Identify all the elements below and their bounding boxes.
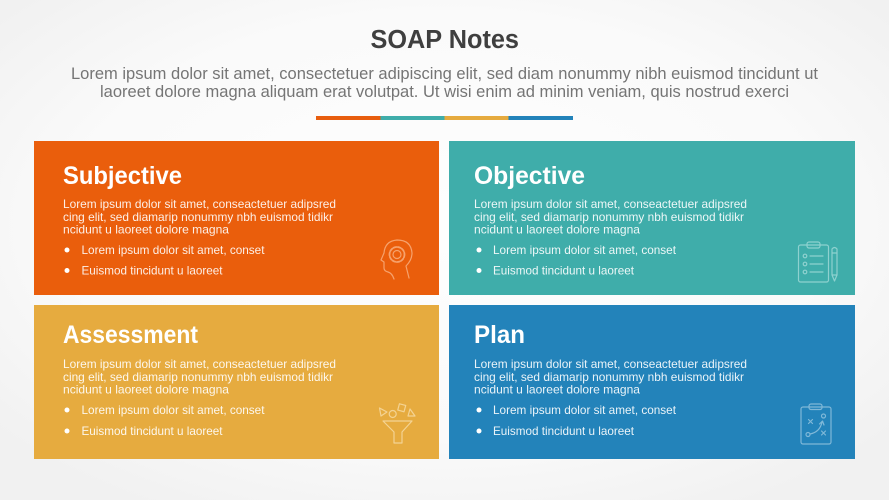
body text: Objective: cing elit, sed diamarip nonummy nbh euismod tidikr <box>474 210 744 224</box>
bullet list: Objective: Lorem ipsum dolor sit amet, conset <box>493 243 677 257</box>
body text: Plan: cing elit, sed diamarip nonummy nbh euismod tidikr <box>474 370 744 384</box>
body text: Assessment: Lorem ipsum dolor sit amet, conseactetuer adipsred <box>63 357 336 371</box>
body text: Assessment: cing elit, sed diamarip nonummy nbh euismod tidikr <box>63 370 333 384</box>
bullet list: Subjective: Euismod tincidunt u laoreet <box>82 264 223 278</box>
icon: clipboard checklist and pencil <box>798 242 837 282</box>
body text: Subjective: Lorem ipsum dolor sit amet, conseactetuer adipsred <box>63 197 336 211</box>
bullet list: Subjective: Lorem ipsum dolor sit amet, conset <box>82 243 265 257</box>
title: SOAP Notes <box>370 26 519 54</box>
bullet list: Assessment <box>64 403 265 438</box>
body text: Plan <box>474 357 747 396</box>
bullet list: Subjective <box>64 243 265 278</box>
body text: Plan: ncidunt u laoreet dolore magna <box>474 382 640 396</box>
subtitle text: laoreet dolore magna aliquam erat volutpat. Ut wisi enim ad minim veniam, quis nostrud exerci <box>100 82 789 101</box>
subtitle text <box>71 64 818 101</box>
icon: head with gear <box>381 240 412 279</box>
heading: Assessment: Assessment <box>63 321 199 349</box>
body text: Objective: ncidunt u laoreet dolore magna <box>474 222 640 236</box>
bullet list: Assessment: Euismod tincidunt u laoreet <box>82 424 223 438</box>
bullet list: Plan <box>476 403 677 438</box>
bullet list: Objective <box>476 243 677 278</box>
icon: clipboard with strategy play <box>801 404 831 444</box>
body text: Subjective: ncidunt u laoreet dolore magna <box>63 222 229 236</box>
icon: funnel with shapes <box>380 404 415 443</box>
bullet list: Plan: Lorem ipsum dolor sit amet, conset <box>493 403 677 417</box>
four-colour divider <box>316 116 573 120</box>
bullet list: Plan: Euismod tincidunt u laoreet <box>493 424 635 438</box>
body text: Assessment: ncidunt u laoreet dolore magna <box>63 382 229 396</box>
body text: Objective: Lorem ipsum dolor sit amet, conseactetuer adipsred <box>474 197 747 211</box>
bullet list: Assessment: Lorem ipsum dolor sit amet, conset <box>82 403 265 417</box>
body text: Subjective <box>63 197 336 236</box>
panel: Plan <box>449 305 855 459</box>
subtitle text: Lorem ipsum dolor sit amet, consectetuer adipiscing elit, sed diam nonummy nibh euismod tincidunt ut <box>71 64 818 83</box>
panel: Objective <box>449 141 855 295</box>
heading: Objective: Objective <box>474 162 585 190</box>
body text: Subjective: cing elit, sed diamarip nonummy nbh euismod tidikr <box>63 210 333 224</box>
bullet list: Objective: Euismod tincidunt u laoreet <box>493 264 635 278</box>
body text: Objective <box>474 197 747 236</box>
heading: Plan: Plan <box>474 321 525 349</box>
body text: Plan: Lorem ipsum dolor sit amet, conseactetuer adipsred <box>474 357 747 371</box>
heading: Subjective: Subjective <box>63 162 182 190</box>
panel: Assessment <box>34 305 439 459</box>
body text: Assessment <box>63 357 336 396</box>
panel: Subjective <box>34 141 439 295</box>
